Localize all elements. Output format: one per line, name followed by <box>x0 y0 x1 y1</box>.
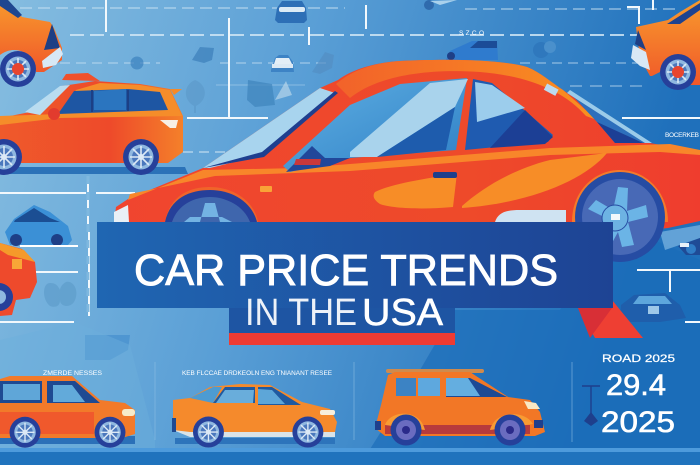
small car: top centre <box>275 1 307 23</box>
car: bottom middle orange <box>172 384 337 448</box>
front wheel <box>165 187 258 222</box>
small illegible caption: right: BOCERKEB <box>665 132 699 139</box>
arrow: trend down <box>582 386 600 426</box>
red ribbon shape <box>578 300 643 338</box>
red underline <box>229 333 455 345</box>
small car: blue hatch left <box>5 205 78 246</box>
rear side window <box>465 79 553 150</box>
door highlights <box>374 173 457 208</box>
small car: dark blue right <box>620 293 686 322</box>
main car: large red sedan <box>114 60 700 262</box>
heading: in the usa: IN THE <box>245 292 357 334</box>
stat: 2025: 2025 <box>601 406 675 439</box>
caption: middle car: KEB FLCCAE DRDKEOLN ENG TNIANANT RESEE <box>182 370 333 377</box>
caption: left car: ZMERDE NESSES <box>43 370 103 377</box>
car: orange wagon left <box>0 73 188 175</box>
front side window <box>283 78 467 172</box>
windshield <box>203 88 335 168</box>
car: orange front left middle <box>0 243 37 316</box>
small mechanical icon <box>533 41 556 58</box>
small illegible caption: top: SZCO <box>459 30 484 37</box>
car: top left corner <box>0 0 63 87</box>
distant parked car: right headlight <box>660 225 700 255</box>
stat: 29.4: 29.4 <box>606 369 666 402</box>
heading: in the usa: USA <box>362 292 444 334</box>
rear wheel <box>572 170 668 222</box>
roof band <box>336 60 597 120</box>
car: top right corner <box>631 0 700 90</box>
bottom strip <box>0 448 700 465</box>
small car: top right of centre <box>446 41 498 60</box>
rear quarter glass <box>567 90 650 143</box>
small car: top scooter <box>424 0 457 10</box>
heading: in the usa <box>245 292 444 334</box>
front light <box>114 205 129 222</box>
road markings <box>0 0 700 322</box>
divider lines <box>155 362 572 442</box>
stats panel <box>582 353 675 439</box>
car: bottom left orange <box>0 376 135 448</box>
body <box>114 60 700 240</box>
shoulder line <box>128 144 700 200</box>
small background icons <box>44 47 334 307</box>
heading: car price trends: CAR PRICE TRENDS <box>134 246 558 295</box>
stats heading: ROAD 2025 <box>602 353 675 365</box>
title banner <box>97 222 613 345</box>
small car: road front <box>271 55 294 72</box>
car: bottom right orange <box>375 369 545 446</box>
